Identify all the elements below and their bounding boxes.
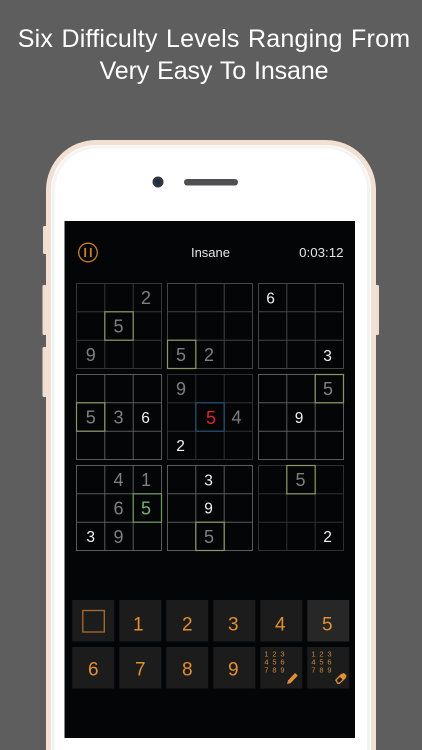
key digits: 1: [133, 614, 144, 636]
selected digit: 5: [206, 408, 216, 428]
grid lines: [76, 284, 344, 550]
key digits: 7: [135, 660, 146, 680]
header bar: [79, 243, 343, 262]
sudoku grid: [76, 284, 344, 550]
given digits grey: 9: [176, 379, 186, 399]
filled digits white: 9: [204, 500, 213, 518]
phone body: [46, 140, 376, 750]
phone mockup: [42, 140, 379, 750]
notes key: eraser: 8: [319, 666, 324, 674]
notes key: eraser: 3: [327, 650, 332, 658]
notes key: pencil: 2: [272, 650, 277, 658]
filled digits white: 6: [266, 290, 275, 308]
number keypad: [72, 600, 349, 688]
phone side buttons: [42, 226, 379, 397]
given digits grey: 6: [113, 498, 124, 518]
notes key: eraser: [311, 650, 346, 684]
notes key: eraser: 7: [311, 666, 316, 674]
key digits: [88, 614, 333, 680]
highlighted cells: [76, 312, 344, 550]
key digits: 9: [228, 660, 239, 680]
notes key: pencil: 1: [264, 650, 269, 658]
notes key: pencil: 7: [264, 666, 269, 674]
speaker: [184, 179, 238, 186]
notes key: eraser: 4: [311, 658, 316, 666]
app screen: [64, 221, 355, 738]
notes key: pencil: 4: [264, 658, 269, 666]
given digits grey: 9: [113, 527, 124, 547]
filled digits white: 3: [86, 529, 95, 546]
title: [18, 25, 410, 85]
given digits grey: 3: [113, 408, 124, 428]
notes key: eraser: 6: [327, 658, 332, 666]
filled digits white: 3: [323, 348, 332, 365]
given digits grey: 5: [113, 316, 124, 336]
key digits: 8: [182, 660, 193, 680]
key digits: 5: [322, 614, 333, 636]
front camera: [152, 176, 164, 188]
filled digits white: 3: [204, 472, 213, 490]
cell mode icon: [83, 610, 104, 632]
given digits grey: 5: [323, 379, 333, 399]
title: Very Easy To Insane: [100, 57, 328, 85]
given digits grey: 5: [204, 527, 214, 547]
given digits grey: 4: [231, 408, 242, 428]
notes key: pencil: 8: [272, 666, 277, 674]
notes key: eraser: 2: [319, 650, 324, 658]
pause icon: [79, 243, 97, 262]
timer: 0:03:12: [299, 245, 344, 260]
notes key: eraser: 5: [319, 658, 324, 666]
title: Six Difficulty Levels Ranging From: [18, 25, 410, 53]
given digits grey: 5: [176, 345, 186, 365]
notes key: pencil: 3: [280, 650, 285, 658]
given digits grey: 5: [295, 470, 306, 490]
key digits: 6: [88, 660, 99, 680]
key backgrounds: [72, 600, 349, 688]
filled digits white: 9: [295, 410, 303, 427]
difficulty label: Insane: [191, 245, 230, 260]
filled digits white: 2: [323, 529, 332, 546]
filled digits white: [86, 290, 332, 546]
key digits: 4: [275, 614, 286, 636]
given digits grey: 5: [86, 408, 96, 428]
notes key: pencil: 6: [280, 658, 285, 666]
given digits grey: [86, 288, 333, 547]
given digits grey: 4: [113, 470, 124, 490]
filled digits white: 6: [141, 410, 150, 427]
given digits grey: 9: [86, 345, 96, 365]
notes key: pencil: 5: [272, 658, 277, 666]
notes key: eraser: 1: [311, 650, 316, 658]
given digits grey: 2: [204, 345, 214, 365]
key digits: 2: [182, 614, 193, 636]
given digits grey: 2: [141, 288, 151, 308]
given digits grey: 1: [141, 470, 151, 490]
green digit: 5: [141, 498, 151, 518]
notes key: pencil: 9: [280, 666, 285, 674]
filled digits white: 2: [176, 438, 185, 455]
notes key: eraser: 9: [327, 666, 332, 674]
key digits: 3: [228, 614, 239, 636]
notes key: pencil: [264, 650, 298, 684]
